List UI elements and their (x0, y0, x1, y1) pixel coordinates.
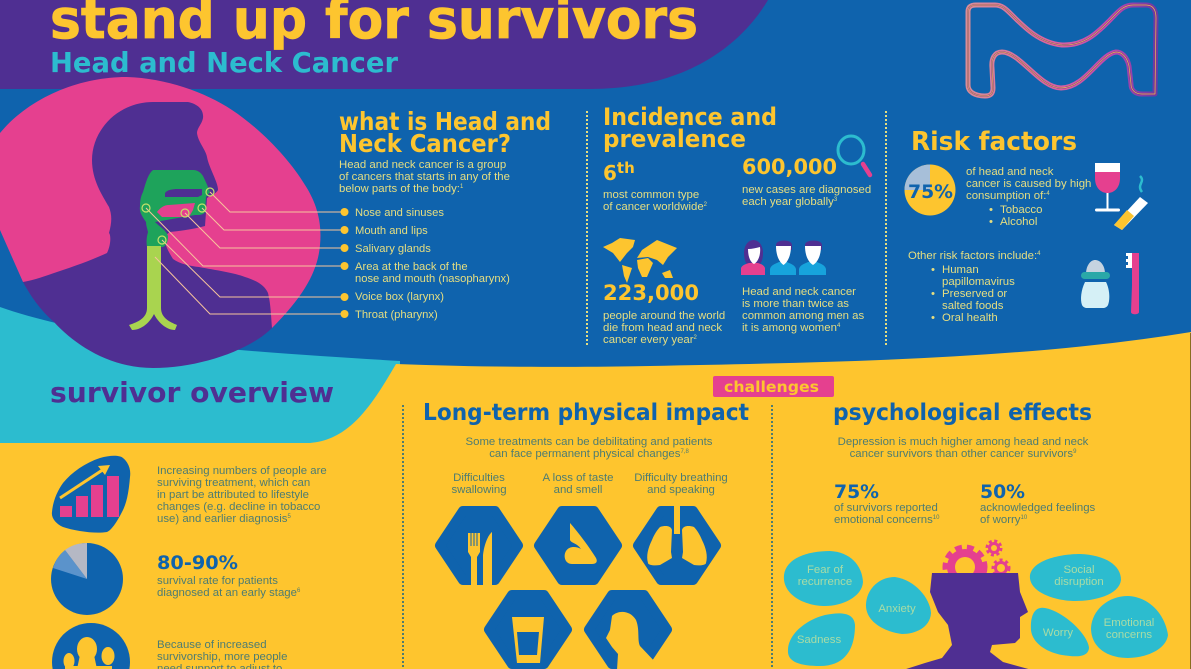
heading: psychological effects (833, 400, 1092, 426)
other risks text: 4 (1037, 251, 1041, 257)
icon: world map (603, 238, 677, 283)
icon: gears (945, 541, 1009, 587)
heading: what is Head and (339, 107, 551, 136)
stat text: men vs women: 4 (837, 323, 841, 329)
icon: nose hexagon (539, 511, 617, 580)
bubble: sadness (788, 613, 855, 666)
intro text: cancer survivors than other cancer survivors (850, 448, 1077, 460)
text: increasing survivors: 5 (287, 514, 291, 520)
stat text: 223,000: cancer every year (603, 334, 698, 346)
text: survival rate: survival rate for patients (157, 575, 278, 587)
icon: lungs hexagon (638, 504, 716, 580)
tag: challenges (713, 376, 834, 397)
panel: long-term physical impact (423, 400, 749, 669)
list labels: Salivary glands (355, 243, 431, 255)
other risks text: • (931, 312, 935, 324)
heading: Neck Cancer? (339, 129, 511, 158)
leader lines (146, 192, 344, 314)
icon: support group (52, 623, 130, 669)
text: increasing survivors: in part be attributed to lifestyle (157, 489, 309, 501)
stat text: 50%: acknowledged feelings (980, 502, 1096, 514)
icon: fork and knife hexagon (440, 511, 518, 585)
icon: salt shaker (1081, 260, 1110, 308)
stat text: 75%: 10 (933, 515, 940, 521)
bubble: emotional concerns: Emotional (1104, 617, 1154, 629)
stat text: 223,000: 2 (694, 335, 698, 341)
icon: cigarette (1114, 176, 1148, 230)
stat text: men vs women: Head and neck cancer (742, 286, 856, 298)
impact labels: Difficulty breathing (634, 472, 728, 484)
impact labels: A loss of taste (543, 472, 613, 484)
intro text: can face permanent physical changes (489, 448, 689, 460)
pie chart: 75% (904, 164, 956, 216)
trachea (129, 246, 177, 330)
woman (744, 240, 763, 264)
bubble: fear of recurrence: Fear of (807, 564, 844, 576)
text: survival rate: 6 (297, 588, 301, 594)
man (805, 240, 822, 250)
stat: 75%: 75% (834, 481, 879, 503)
consumption text: of head and neck (966, 166, 1054, 178)
stat: 600,000: 600,000 (742, 155, 837, 179)
list bullets (340, 208, 348, 318)
consumption text: 4 (1046, 191, 1050, 197)
man (776, 240, 792, 250)
stat text: men vs women: it is among women (742, 322, 841, 334)
stat: 50%: 50% (980, 481, 1025, 503)
consumption text: • (989, 204, 993, 216)
pink blob (0, 77, 320, 330)
yellow lower panel (0, 332, 1191, 669)
consumption text: Alcohol (1000, 216, 1037, 228)
stat text: 50%: 10 (1021, 515, 1028, 521)
icon: growth chart (52, 456, 130, 533)
panel: psychological effects (784, 400, 1168, 669)
bubble: anxiety (866, 577, 931, 634)
bubble: emotional concerns (1091, 596, 1168, 658)
impact labels: Difficulties (453, 472, 505, 484)
tongue (157, 203, 195, 217)
consumption text: cancer is caused by high (966, 178, 1091, 190)
head silhouette (903, 573, 1032, 669)
intro text: below parts of the body: (339, 183, 464, 195)
other risks text: salted foods (942, 300, 1004, 312)
panel: incidence and prevalence (603, 103, 871, 346)
intro text: Some treatments can be debilitating and patients (466, 436, 713, 448)
panel: survivor overview items (51, 456, 327, 669)
stat: 6th: th (617, 159, 635, 177)
other risks text: Other risk factors include: (908, 250, 1041, 262)
impact labels: and speaking (647, 484, 715, 496)
stat text: 75%: of survivors reported (834, 502, 938, 514)
icon: wine glass (1095, 163, 1120, 212)
intro text: 1 (460, 184, 464, 190)
stat text: men vs women: is more than twice as (742, 298, 849, 310)
stat: 80-90%: 80-90% (157, 552, 238, 574)
stat text: 223,000: die from head and neck (603, 322, 722, 334)
intro text: Depression is much higher among head and neck (838, 436, 1089, 448)
stat text: 50%: of worry (980, 514, 1028, 526)
pie chart: survival rate (51, 543, 123, 615)
text: support: Because of increased (157, 639, 267, 651)
stat text: 75%: emotional concerns (834, 514, 940, 526)
panel: risk factors (904, 127, 1148, 324)
logo: M mark (968, 5, 1156, 96)
list labels: Voice box (larynx) (355, 291, 444, 303)
stat text: 223,000: people around the world (603, 310, 725, 322)
bubble: worry: Worry (1043, 627, 1073, 639)
nasal passage (165, 189, 202, 197)
consumption text: consumption of: (966, 190, 1050, 202)
intro text: 9 (1073, 449, 1077, 455)
stat text: 600,000: 3 (834, 197, 838, 203)
pie chart: 75%: 75% (908, 181, 953, 203)
purple title banner (0, 0, 768, 89)
cyan lower-left band (0, 307, 400, 443)
intro text: of cancers that starts in any of the (339, 171, 510, 183)
anatomy illustration (0, 77, 344, 368)
bubble: anxiety: Anxiety (878, 603, 916, 615)
other risks text: papillomavirus (942, 276, 1015, 288)
icon: magnifying glass (838, 136, 870, 175)
other risks text: Preserved or (942, 288, 1007, 300)
text: support: survivorship, more people (157, 651, 287, 663)
stat text: 6th: of cancer worldwide (603, 201, 708, 213)
text: increasing survivors: use) and earlier diagnosis (157, 513, 291, 525)
bubble: social disruption (1030, 554, 1121, 601)
stat: 223,000: 223,000 (603, 281, 699, 305)
leader rings (142, 188, 214, 244)
list labels: nose and mouth (nasopharynx) (355, 273, 510, 285)
bubble: social disruption: Social (1063, 564, 1095, 576)
consumption text: Tobacco (1000, 204, 1042, 216)
intro text: Head and neck cancer is a group (339, 159, 506, 171)
other risks text: • (931, 264, 935, 276)
icon: glass hexagon (489, 595, 567, 664)
icon: head hexagon (589, 595, 667, 669)
stat text: men vs women: common among men as (742, 310, 864, 322)
heading: Incidence and (603, 103, 777, 131)
heading: Long-term physical impact (423, 400, 749, 426)
bubble: emotional concerns: concerns (1106, 629, 1152, 641)
heading: Risk factors (911, 127, 1077, 157)
impact labels: swallowing (451, 484, 507, 496)
heading: prevalence (603, 125, 746, 153)
bubble: worry (1031, 608, 1089, 656)
other risks text: Human (942, 264, 979, 276)
text: survival rate: diagnosed at an early stage (157, 587, 301, 599)
panel: what is head and neck cancer (339, 107, 551, 321)
bubble: sadness: Sadness (797, 634, 841, 646)
subtitle: Head and Neck Cancer (50, 46, 398, 79)
icon: people (741, 240, 826, 275)
text: increasing survivors: surviving treatment, which can (157, 477, 310, 489)
green throat and nasal cavity (140, 170, 210, 247)
other risks text: Oral health (942, 312, 998, 324)
stat text: 600,000: new cases are diagnosed (742, 184, 871, 196)
list labels: Area at the back of the (355, 261, 468, 273)
heading: survivor overview: survivor overview (50, 376, 334, 409)
bubble: fear of recurrence: recurrence (798, 576, 852, 588)
other risks text: • (931, 288, 935, 300)
purple head and shoulders (23, 102, 272, 368)
list labels: Mouth and lips (355, 225, 428, 237)
list labels: Nose and sinuses (355, 207, 444, 219)
icon: toothbrush (1126, 253, 1139, 314)
stat text: 6th: 2 (704, 202, 708, 208)
stat text: 6th: most common type (603, 189, 699, 201)
text: increasing survivors: changes (e.g. decline in tobacco (157, 501, 320, 513)
tag: challenges: challenges (724, 378, 819, 396)
consumption text: • (989, 216, 993, 228)
stat text: 600,000: each year globally (742, 196, 838, 208)
text: increasing survivors: Increasing numbers of people are (157, 465, 327, 477)
impact labels: and smell (554, 484, 602, 496)
stat: 6th: 6 (603, 161, 617, 185)
bubble: fear of recurrence (784, 551, 863, 606)
list labels: Throat (pharynx) (355, 309, 438, 321)
intro text: 7,8 (680, 449, 689, 455)
bubble: social disruption: disruption (1054, 576, 1104, 588)
